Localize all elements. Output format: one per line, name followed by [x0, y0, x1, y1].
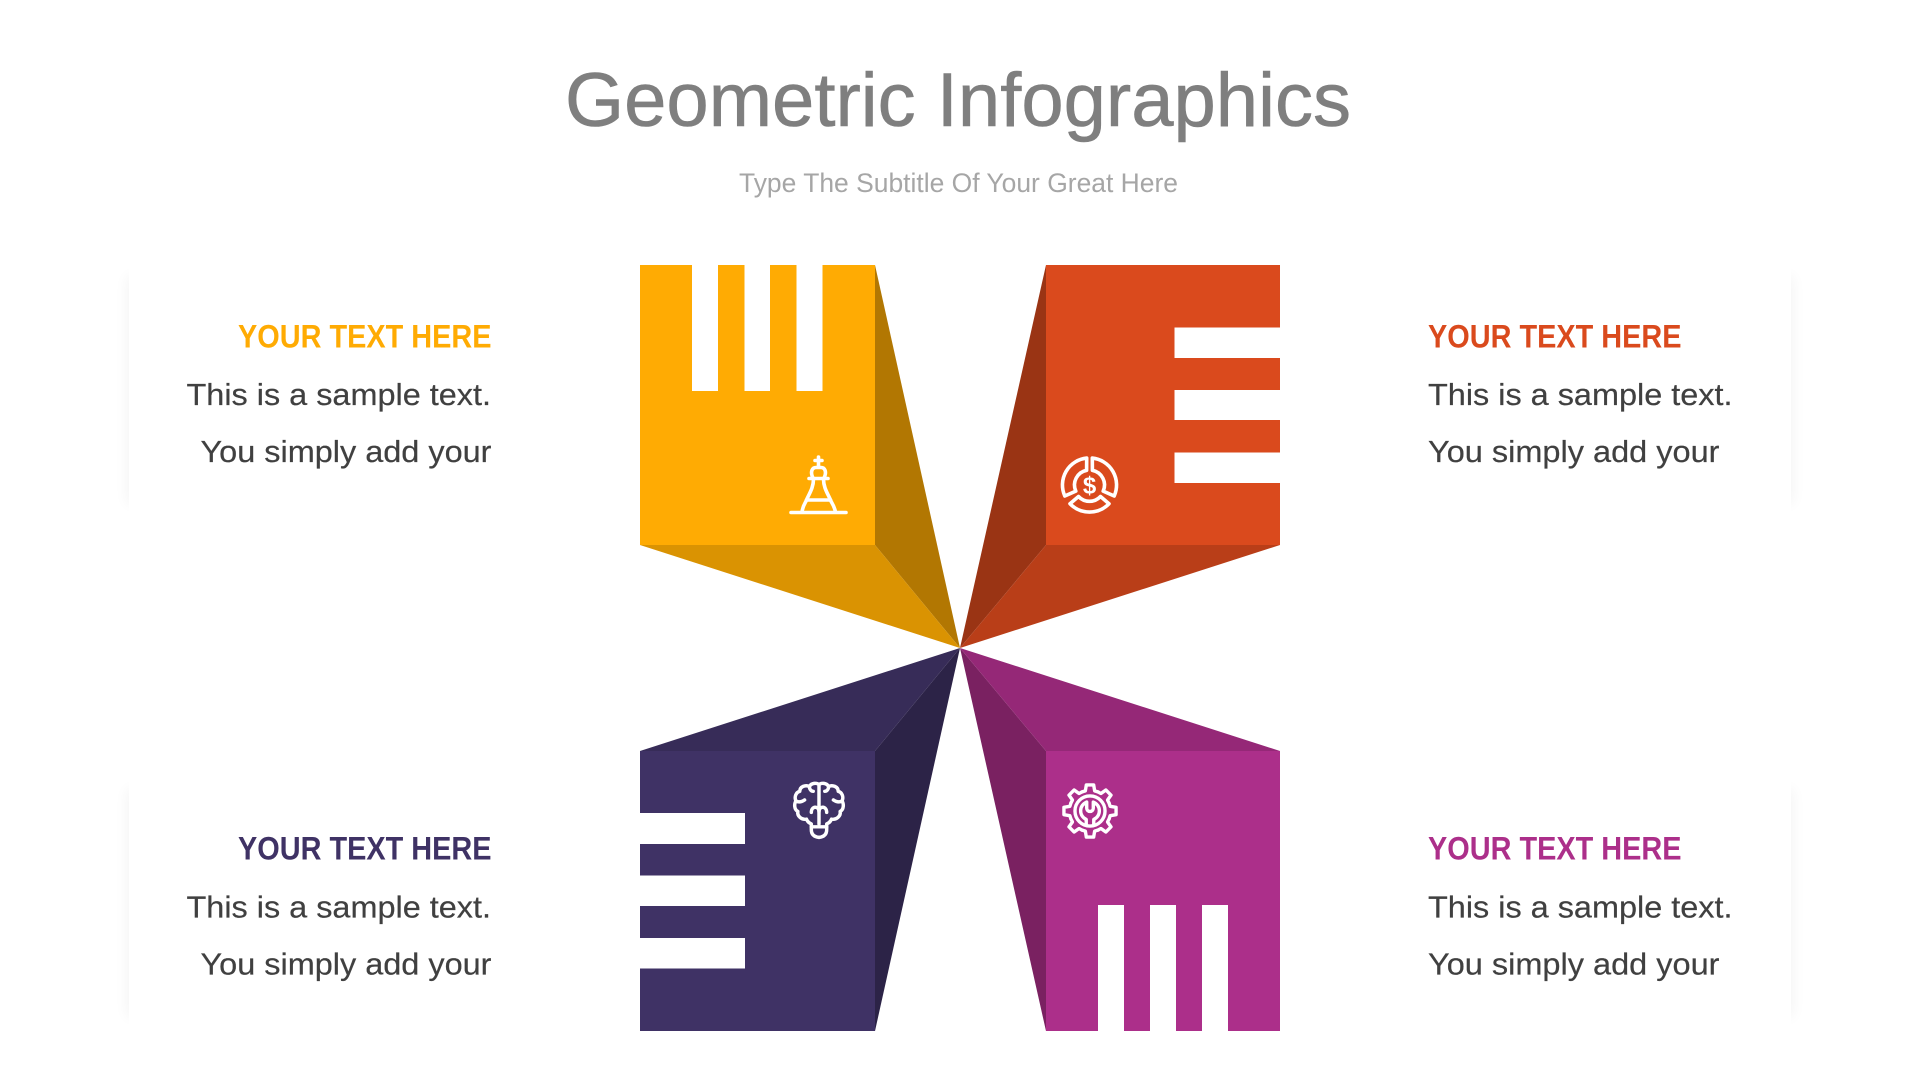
text block: bottom left: YOUR TEXT HERE — [238, 830, 492, 866]
text block: bottom left — [186, 830, 492, 982]
text block: top left: You simply add your — [200, 435, 492, 469]
text block: top left: YOUR TEXT HERE — [238, 318, 492, 354]
panel: yellow block — [640, 265, 960, 648]
text block: bottom right: YOUR TEXT HERE — [1428, 830, 1682, 866]
card: bottom left background — [127, 773, 649, 1033]
text block: bottom right: You simply add your — [1428, 948, 1720, 982]
panel: orange block — [960, 265, 1280, 648]
text block: top right — [1428, 318, 1732, 469]
card: top left background — [127, 260, 649, 520]
text block: bottom left: This is a sample text. — [186, 890, 491, 924]
text block: bottom left: You simply add your — [200, 948, 492, 982]
panel: purple block — [640, 648, 960, 1031]
text block: top left: This is a sample text. — [186, 378, 491, 412]
icon: gear and wrench — [1064, 785, 1116, 837]
icon: chess king — [791, 457, 846, 512]
subtitle: Type The Subtitle Of Your Great Here — [739, 168, 1178, 198]
card: bottom right background — [1271, 773, 1793, 1033]
panel: magenta block — [960, 648, 1280, 1031]
text block: bottom right — [1428, 830, 1732, 982]
text block: bottom right: This is a sample text. — [1428, 890, 1732, 924]
title: Geometric Infographics — [565, 58, 1351, 143]
text block: top right: This is a sample text. — [1428, 378, 1732, 412]
icon: brain bulb — [795, 783, 843, 837]
text block: top right: You simply add your — [1428, 435, 1720, 469]
icon: dollar target: $ — [1083, 472, 1097, 500]
text block: top right: YOUR TEXT HERE — [1428, 318, 1682, 354]
card: top right background — [1271, 260, 1793, 520]
icon: dollar target — [1062, 458, 1117, 512]
text block: top left — [186, 318, 492, 469]
